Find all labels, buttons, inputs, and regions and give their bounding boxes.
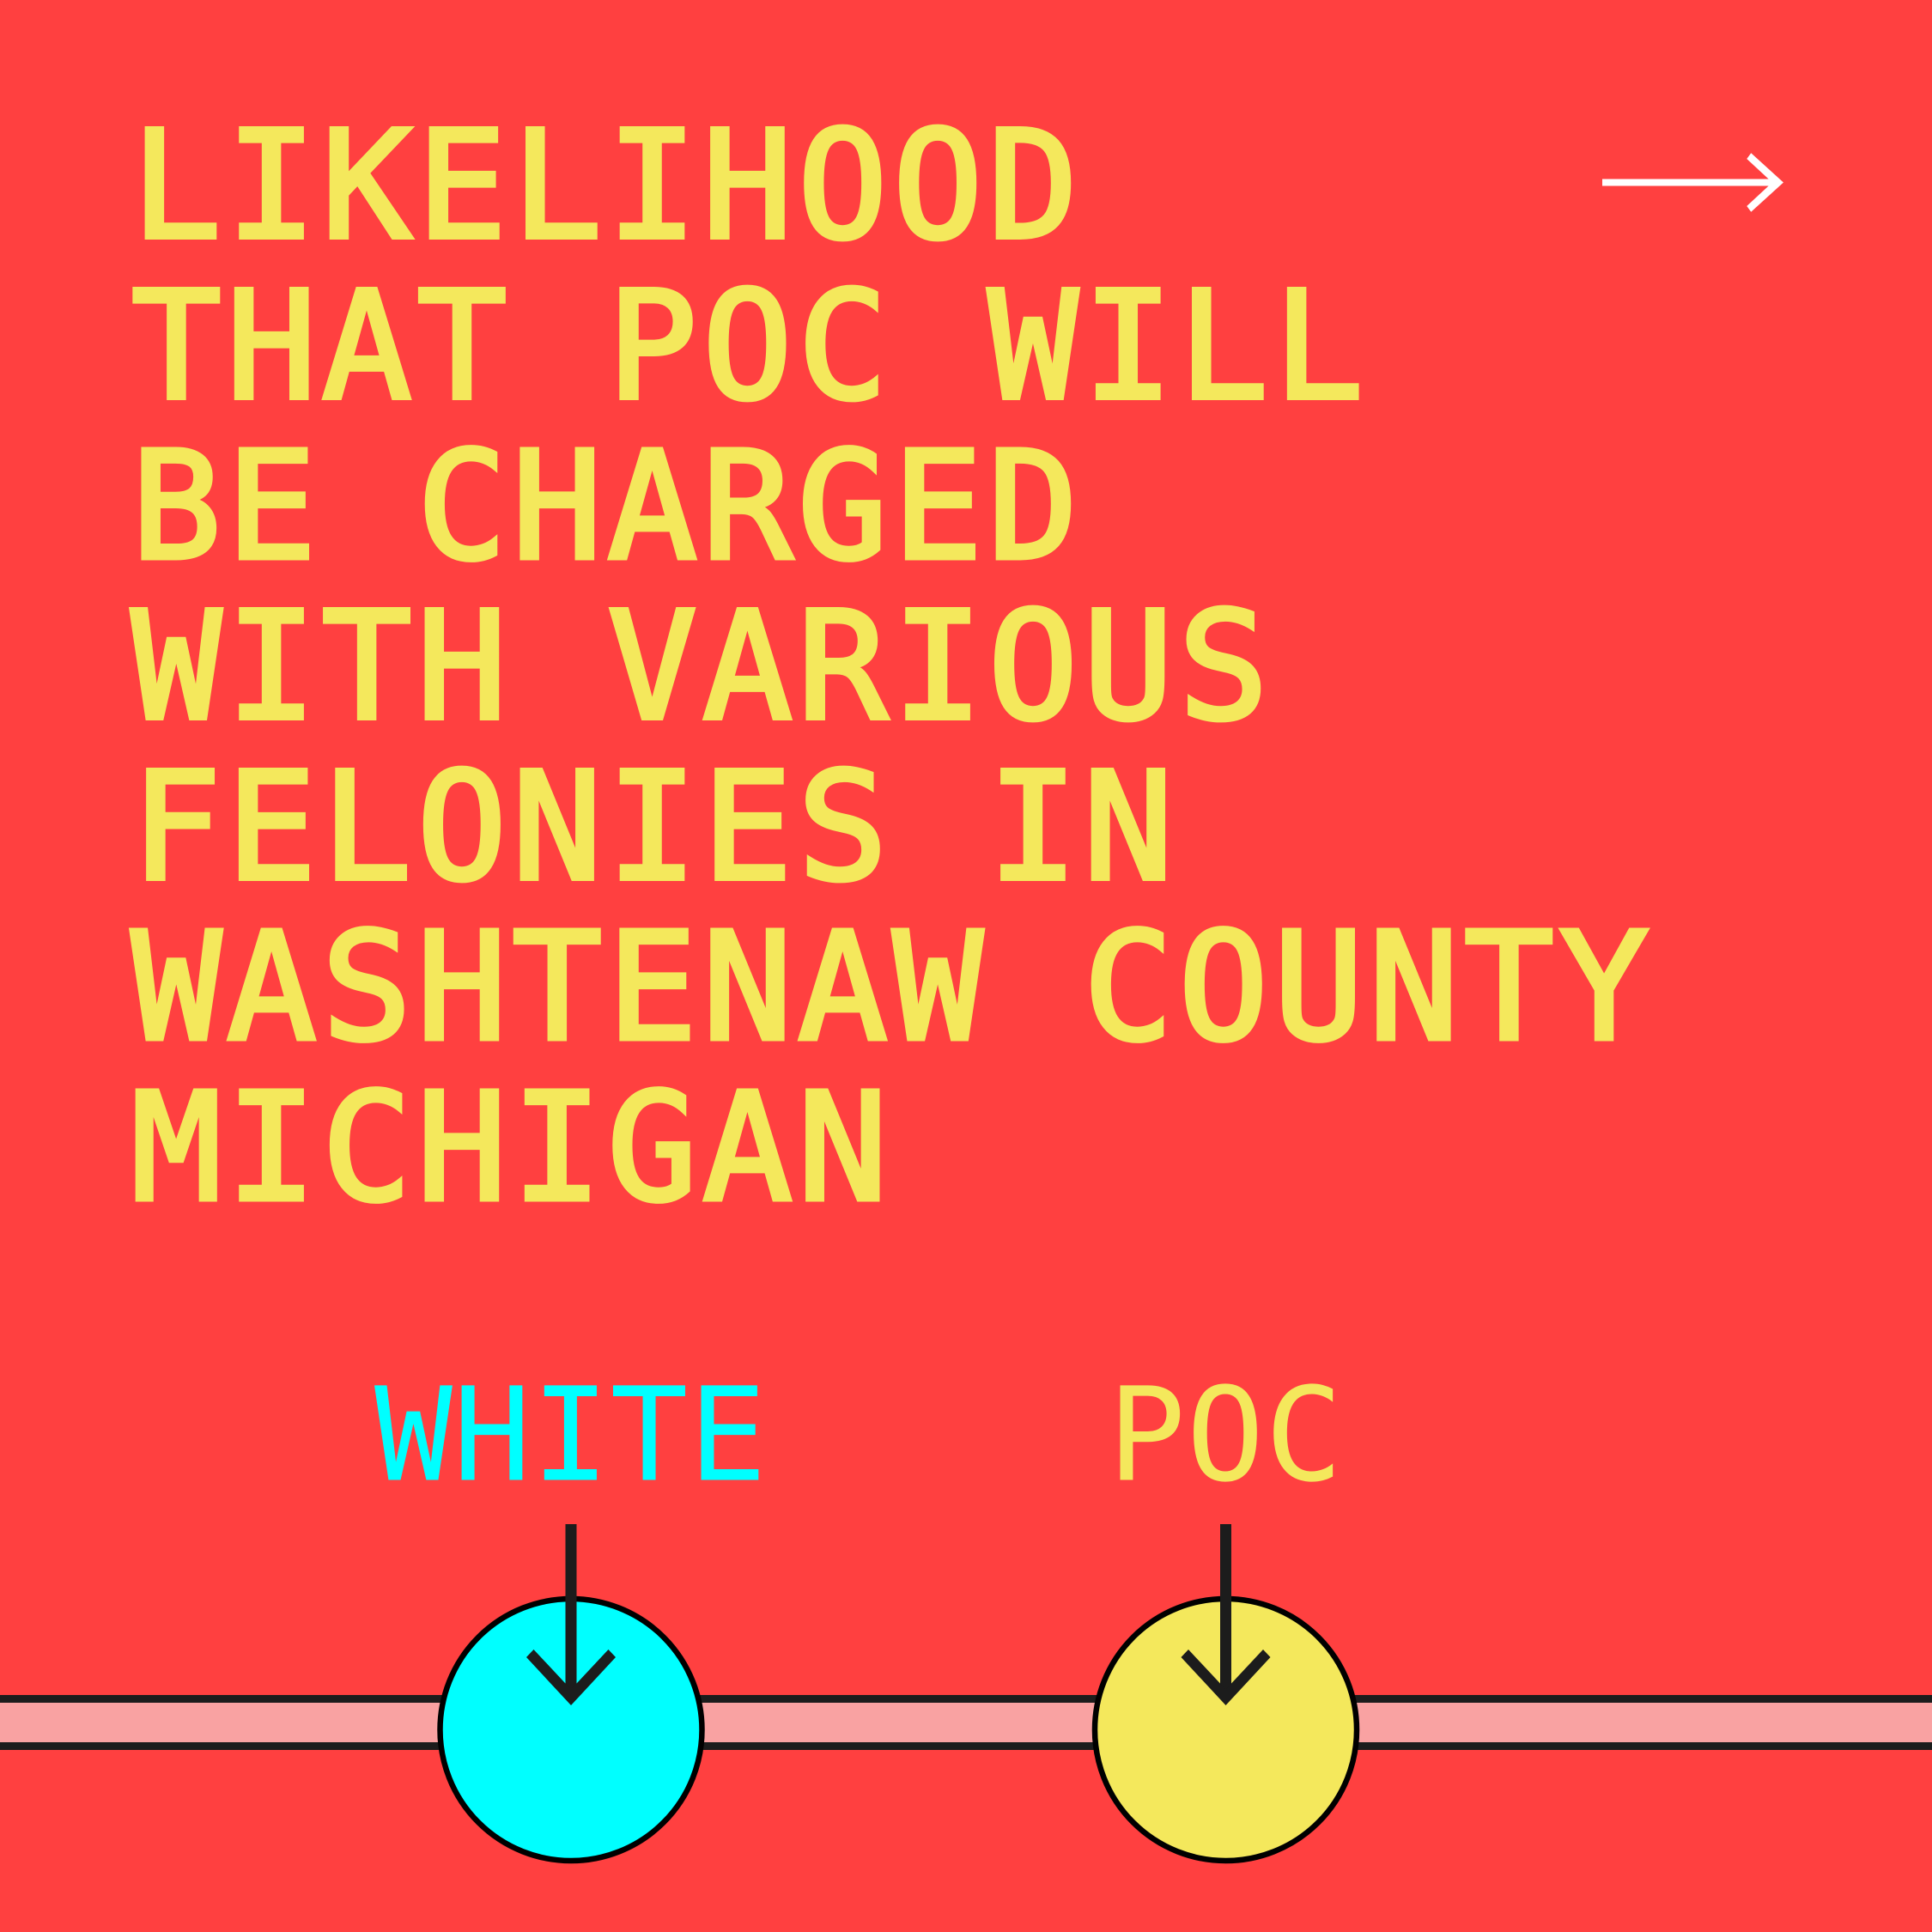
label: WHITE: WHITE (374, 1360, 768, 1511)
title: WASHTENAW COUNTY (131, 901, 1655, 1074)
title: MICHIGAN (131, 1061, 893, 1235)
title: THAT POC WILL (131, 259, 1369, 433)
marker: white circle (440, 1599, 702, 1861)
marker: POC circle (1095, 1599, 1357, 1861)
arrow: down to white marker (526, 1524, 616, 1705)
title: BE CHARGED (131, 420, 1084, 593)
title: WITH VARIOUS (131, 580, 1273, 753)
scale bar (0, 1695, 1932, 1750)
label: POC: POC (1108, 1360, 1344, 1511)
title: FELONIES IN (131, 740, 1178, 914)
title (131, 99, 1655, 1235)
icon: white arrow pointing right (1602, 153, 1783, 212)
title: LIKELIHOOD (131, 99, 1084, 272)
arrow: down to POC marker (1182, 1524, 1271, 1705)
